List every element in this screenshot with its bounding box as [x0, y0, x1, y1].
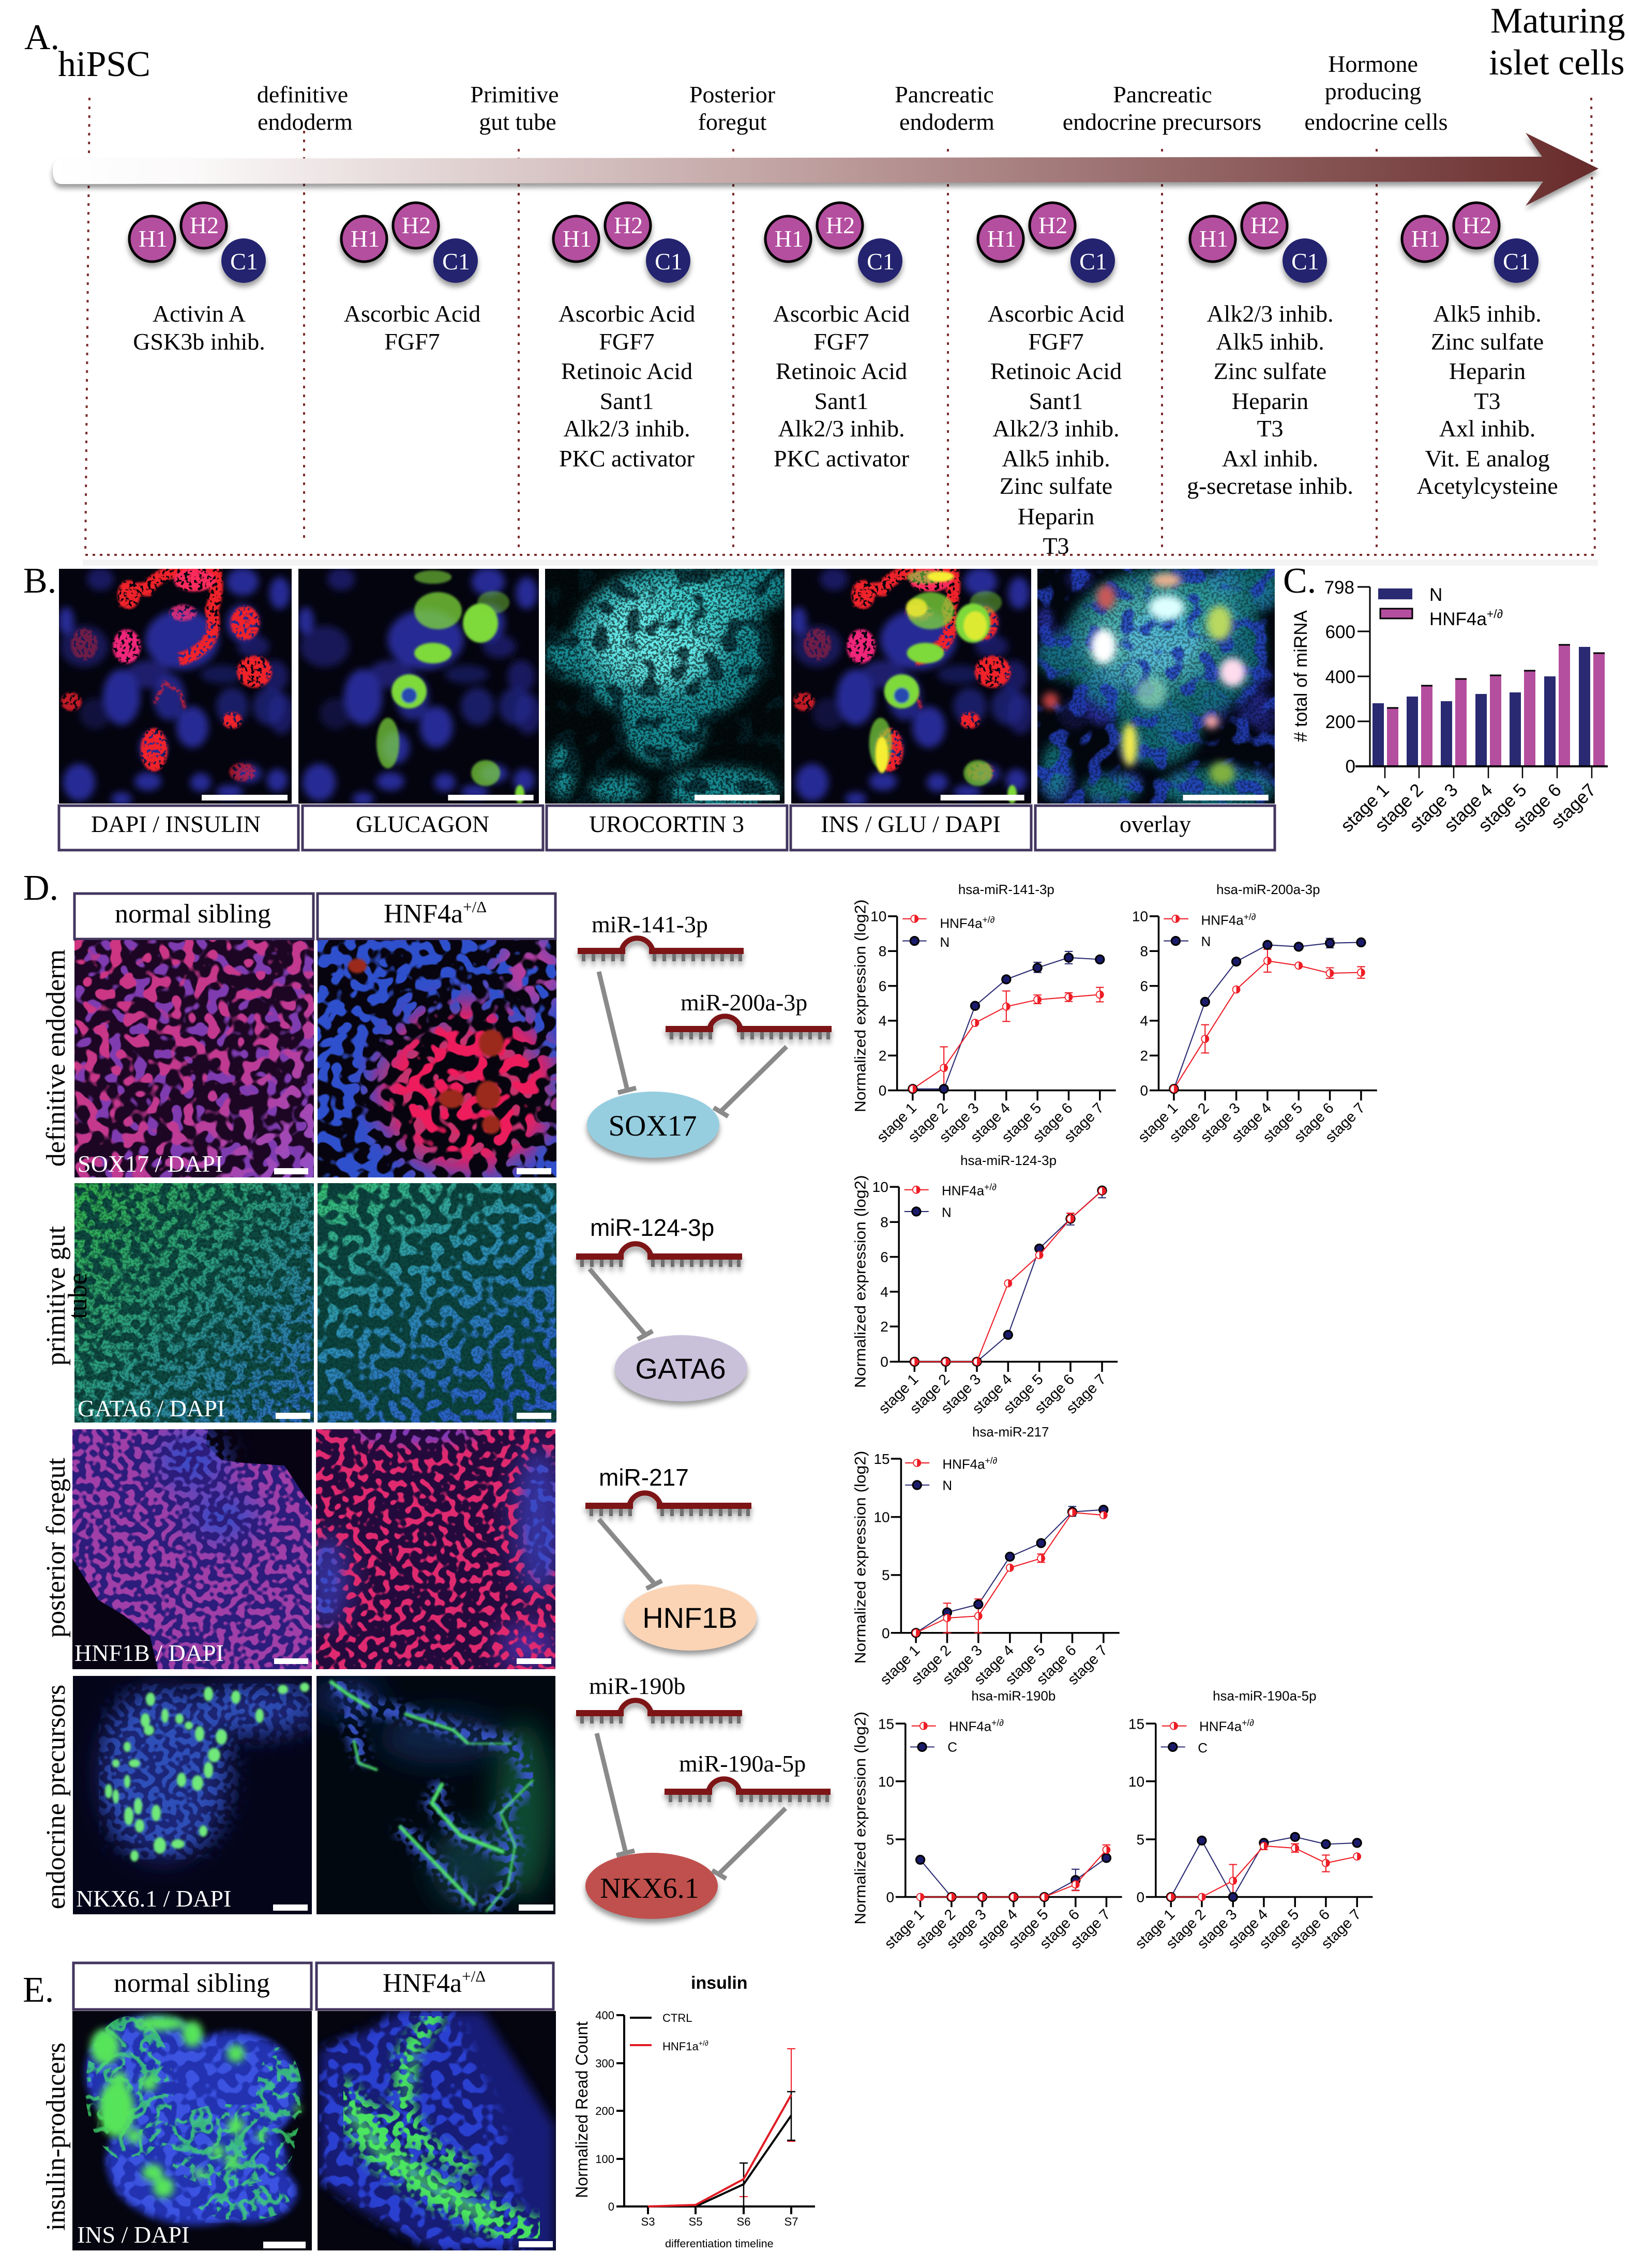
line chart: hsa-miR-190b: stage 2: [913, 1906, 959, 1952]
cell trio icon, stage 1: [129, 203, 266, 283]
line chart: hsa-miR-200a-3p: HNF4a: [1201, 914, 1244, 928]
bar chart: total miRNA per stage: stage 6: [1509, 780, 1565, 836]
line chart: hsa-miR-190b: stage 7: [1067, 1906, 1114, 1952]
line chart: insulin read count: S7: [785, 2215, 798, 2228]
line chart: hsa-miR-190a-5p: stage 7: [1318, 1906, 1364, 1952]
line chart: hsa-miR-200a-3p: stage 1: [1135, 1100, 1181, 1146]
line chart: hsa-miR-141-3p: HNF4a: [940, 916, 983, 931]
line chart: hsa-miR-124-3p: 8: [880, 1214, 888, 1230]
factors: stage 5: Alk5 inhib.: [1002, 445, 1110, 472]
line chart: hsa-miR-217: 15: [873, 1451, 890, 1467]
line chart: hsa-miR-217: hsa-miR-217: [972, 1425, 1049, 1440]
line chart: insulin read count: differentiation timeline: [665, 2237, 774, 2250]
factors: stage 6: Heparin: [1232, 388, 1308, 414]
line chart: hsa-miR-124-3p: 4: [880, 1284, 888, 1300]
line chart: hsa-miR-190b: 5: [886, 1832, 894, 1848]
label texts, panel B: INS / GLU / DAPI: [821, 811, 1001, 837]
line chart: hsa-miR-217: HNF4a: [942, 1457, 985, 1472]
row labels, panel D: definitive endoderm: [41, 949, 71, 1167]
line chart: hsa-miR-200a-3p: 4: [1140, 1013, 1148, 1029]
micrograph: overlay: [1037, 569, 1275, 804]
bar chart: total miRNA per stage: 798: [1324, 578, 1354, 598]
line chart: hsa-miR-124-3p: 6: [880, 1249, 888, 1265]
line chart: insulin read count: insulin: [691, 1973, 748, 1993]
miRNA target diagram: SOX17: miR-141-3p: [592, 911, 708, 938]
micrograph: posterior foregut, HNF4a mutant: [316, 1429, 555, 1669]
line chart: hsa-miR-200a-3p: stage 2: [1166, 1100, 1212, 1146]
factors: stage 6: Alk2/3 inhib.: [1206, 300, 1334, 327]
micrograph: primitive gut tube, normal sibling: [74, 1183, 314, 1423]
line chart: hsa-miR-124-3p: 10: [872, 1179, 888, 1195]
cell trio icon, stage 7: H2: [1462, 212, 1491, 238]
line chart: hsa-miR-200a-3p: 2: [1140, 1048, 1148, 1064]
line chart: hsa-miR-190a-5p: stage 4: [1225, 1906, 1271, 1952]
row labels, panel D: tube: [63, 1273, 93, 1319]
cell trio icon, stage 6: [1190, 203, 1327, 283]
stage headings: foregut: [698, 109, 767, 135]
factors: stage 3: FGF7: [599, 328, 655, 355]
row labels, panel D: [41, 949, 93, 1909]
faint shadow under box: [83, 560, 1598, 566]
line chart: insulin read count: 300: [595, 2057, 614, 2070]
column headers, panel D: HNF4a: [384, 899, 463, 929]
overlay labels on micrographs: SOX17 / DAPI: [78, 1151, 223, 1177]
line chart: hsa-miR-124-3p: stage 1: [876, 1371, 922, 1417]
cell trio icon, stage 3: H1: [563, 225, 592, 252]
line chart: hsa-miR-141-3p: stage 3: [936, 1100, 983, 1146]
line chart: hsa-miR-190b: 15: [878, 1716, 894, 1732]
micrograph: insulin, normal sibling: [72, 2011, 312, 2250]
factors: stage 3: Retinoic Acid: [561, 358, 692, 384]
factors: stage 7: [1416, 300, 1558, 499]
line chart: insulin read count: 400: [595, 2009, 614, 2022]
factors: stage 5: Sant1: [1029, 388, 1083, 414]
label texts, panel B: overlay: [1120, 811, 1191, 837]
line chart: hsa-miR-124-3p: stage 4: [969, 1371, 1015, 1417]
line chart: hsa-miR-190b: +/∂: [991, 1718, 1004, 1728]
factors: stage 4: Alk2/3 inhib.: [778, 415, 905, 442]
label texts, panel B: [91, 811, 1191, 837]
bar chart: total miRNA per stage: stage 3: [1406, 780, 1462, 836]
line chart: hsa-miR-190a-5p: [1128, 1689, 1372, 1952]
line chart: hsa-miR-200a-3p: 0: [1140, 1082, 1148, 1098]
row labels, panel D: posterior foregut: [41, 1457, 71, 1638]
line chart: hsa-miR-141-3p: 2: [879, 1048, 886, 1064]
line chart: hsa-miR-141-3p: 4: [879, 1013, 886, 1029]
cell trio icon, stage 3: C1: [655, 248, 683, 275]
miRNA target diagram: NKX6.1: NKX6.1: [600, 1872, 699, 1904]
line chart: hsa-miR-217: stage 3: [940, 1642, 986, 1688]
stage headings: gut tube: [479, 109, 556, 135]
line chart: hsa-miR-190a-5p: HNF4a: [1199, 1719, 1242, 1734]
factors: stage 3: Sant1: [600, 388, 654, 414]
stage headings: endocrine precursors: [1063, 109, 1261, 135]
overlay labels on micrographs: GATA6 / DAPI: [78, 1395, 225, 1422]
line chart: hsa-miR-141-3p: 10: [870, 909, 886, 925]
line chart: hsa-miR-190b: C: [947, 1740, 957, 1755]
differentiation timeline arrow: [53, 133, 1598, 206]
stage headings: endoderm: [258, 109, 353, 135]
line chart: hsa-miR-190b: stage 4: [975, 1906, 1021, 1952]
factors: stage 6: Alk5 inhib.: [1216, 328, 1324, 355]
line chart: hsa-miR-141-3p: N: [940, 935, 949, 950]
factors: stage 4: Sant1: [814, 388, 868, 414]
line chart: hsa-miR-200a-3p: stage 5: [1260, 1100, 1306, 1146]
micrograph: urocortin 3: [545, 569, 785, 804]
factors: stage 2: Ascorbic Acid: [344, 300, 480, 327]
micrograph: primitive gut tube, HNF4a mutant: [318, 1183, 556, 1423]
bar chart: total miRNA per stage: 600: [1325, 622, 1355, 642]
line chart: hsa-miR-190b: 10: [878, 1774, 894, 1790]
row labels, panel D: primitive gut: [41, 1226, 71, 1366]
micrograph: posterior foregut, normal sibling: [72, 1429, 312, 1669]
line chart: hsa-miR-124-3p: 2: [880, 1319, 888, 1335]
cell trio icon, stage 3: [553, 203, 690, 283]
bar chart: total miRNA per stage: stage 4: [1440, 780, 1497, 836]
line chart: insulin read count: 0: [608, 2200, 614, 2213]
miRNA target diagram: GATA6: miR-124-3p: [590, 1214, 714, 1241]
line chart: hsa-miR-217: stage 7: [1065, 1642, 1111, 1688]
cell trio icon, stage 7: C1: [1503, 248, 1531, 275]
bar chart: total miRNA per stage: 0: [1346, 757, 1355, 777]
micrograph: insulin, HNF4a mutant: [318, 2011, 556, 2250]
line chart: hsa-miR-200a-3p: 10: [1132, 909, 1148, 925]
line chart: hsa-miR-217: Normalized expression (log2): [852, 1451, 869, 1664]
cell trio icon, stage 4: C1: [867, 248, 895, 275]
line chart: hsa-miR-141-3p: stage 7: [1061, 1100, 1107, 1146]
column headers, panel E: [73, 1963, 553, 2009]
cell trio icon, stage 2: C1: [442, 248, 470, 275]
line chart: hsa-miR-217: 10: [873, 1509, 890, 1525]
line chart: hsa-miR-190a-5p: hsa-miR-190a-5p: [1213, 1689, 1317, 1704]
stage headings: producing: [1325, 78, 1421, 104]
line chart: hsa-miR-217: [852, 1425, 1120, 1688]
factors: stage 1: GSK3b inhib.: [133, 328, 265, 355]
line chart: hsa-miR-200a-3p: 8: [1140, 943, 1148, 959]
bar chart: total miRNA per stage: HNF4a: [1429, 609, 1487, 629]
line charts, lower block: [852, 1425, 1372, 1952]
bar chart: total miRNA per stage: N: [1429, 585, 1442, 605]
line chart: hsa-miR-124-3p: hsa-miR-124-3p: [960, 1154, 1057, 1168]
miRNA target diagram: NKX6.1: miR-190b: [589, 1673, 686, 1699]
miRNA target diagram: NKX6.1: miR-190a-5p: [679, 1750, 806, 1777]
cell trio icon, stage 5: C1: [1079, 248, 1107, 275]
factors: stage 3: [559, 300, 695, 472]
factors: stage 4: Retinoic Acid: [776, 358, 907, 384]
line charts, top block: [852, 883, 1377, 1417]
line chart: insulin read count: 100: [595, 2153, 614, 2166]
stage headings: definitive: [257, 81, 348, 108]
label texts, panel B: DAPI / INSULIN: [91, 811, 261, 837]
factors: stage 1: Activin A: [153, 300, 246, 327]
line chart: hsa-miR-190b: Normalized expression (log2): [852, 1712, 869, 1925]
column headers, panel D: normal sibling: [115, 899, 271, 929]
factors: stage 6: T3: [1257, 415, 1284, 442]
line chart: hsa-miR-217: +/∂: [985, 1455, 998, 1465]
cell trio icon, stage 5: H1: [987, 225, 1016, 252]
miRNA target diagram: GATA6: [576, 1214, 747, 1401]
end cell type: maturing islet cells: [1489, 1, 1625, 83]
line chart: hsa-miR-190a-5p: 5: [1137, 1832, 1144, 1848]
line chart: hsa-miR-217: 5: [882, 1567, 890, 1583]
factors: stage 5: [988, 300, 1124, 559]
line chart: hsa-miR-190a-5p: 10: [1128, 1774, 1144, 1790]
column headers, panel E: normal sibling: [114, 1969, 270, 1998]
overlay label INS / DAPI: INS / DAPI: [77, 2221, 189, 2248]
line chart: hsa-miR-200a-3p: stage 6: [1291, 1100, 1337, 1146]
line chart: hsa-miR-217: stage 2: [908, 1642, 955, 1688]
line chart: hsa-miR-141-3p: 8: [879, 943, 886, 959]
factors: stage 5: Heparin: [1018, 503, 1094, 530]
factors: stage 5: T3: [1043, 533, 1069, 559]
stage headings: Hormone: [1328, 51, 1418, 77]
overlay labels on micrographs: HNF1B / DAPI: [74, 1640, 224, 1666]
factors: stage 5: Alk2/3 inhib.: [992, 415, 1120, 442]
line chart: hsa-miR-200a-3p: hsa-miR-200a-3p: [1216, 883, 1320, 897]
factors: stage 6: Axl inhib.: [1222, 445, 1318, 472]
cell trio icon, stage 5: H2: [1038, 212, 1067, 238]
line chart: hsa-miR-141-3p: stage 6: [1030, 1100, 1076, 1146]
label boxes, panel B: [59, 806, 1275, 850]
line chart: hsa-miR-200a-3p: [1132, 883, 1377, 1146]
line chart: hsa-miR-141-3p: stage 2: [905, 1100, 951, 1146]
line chart: hsa-miR-190a-5p: stage 6: [1287, 1906, 1333, 1952]
line chart: hsa-miR-190a-5p: 0: [1137, 1889, 1144, 1906]
line chart: hsa-miR-124-3p: 0: [880, 1354, 888, 1370]
bar chart: total miRNA per stage: 400: [1325, 667, 1355, 687]
line chart: hsa-miR-124-3p: stage 7: [1063, 1371, 1109, 1417]
micrograph: endocrine precursors, normal sibling: [73, 1676, 312, 1914]
column headers, panel D: +/Δ: [463, 898, 487, 916]
line chart: hsa-miR-190a-5p: C: [1198, 1741, 1208, 1756]
miRNA target diagram: SOX17: miR-200a-3p: [681, 989, 807, 1016]
line chart: hsa-miR-190b: hsa-miR-190b: [971, 1689, 1055, 1704]
line chart: hsa-miR-124-3p: +/∂: [984, 1182, 997, 1192]
factors: stage 7: T3: [1474, 388, 1501, 414]
line chart: hsa-miR-190a-5p: 15: [1128, 1716, 1144, 1732]
line chart: insulin read count: S5: [689, 2215, 702, 2228]
stage boundaries: dotted lines and box: [85, 98, 1595, 555]
line chart: insulin read count: [572, 1973, 815, 2250]
line chart: hsa-miR-190b: stage 5: [1005, 1906, 1052, 1952]
factors: stage 7: Alk5 inhib.: [1433, 300, 1542, 327]
factors: stage 7: Axl inhib.: [1439, 415, 1535, 442]
factors: stage 5: Ascorbic Acid: [988, 300, 1124, 327]
line chart: hsa-miR-200a-3p: N: [1201, 934, 1211, 949]
line chart: hsa-miR-124-3p: HNF4a: [942, 1184, 984, 1198]
line chart: hsa-miR-141-3p: stage 4: [968, 1100, 1014, 1146]
line chart: hsa-miR-190b: stage 1: [881, 1906, 928, 1952]
bar chart: total miRNA per stage: stage 1: [1337, 780, 1393, 836]
line chart: hsa-miR-200a-3p: +/∂: [1244, 912, 1256, 922]
factors: stage 6: Zinc sulfate: [1214, 358, 1326, 384]
factors: stage 4: Ascorbic Acid: [773, 300, 910, 327]
line chart: insulin read count: S3: [641, 2215, 655, 2228]
panel label C: C.: [1283, 561, 1316, 601]
end cell type: maturing islet cells: Maturing: [1490, 1, 1625, 41]
stage headings: endoderm: [899, 109, 994, 135]
cell trio icon, stage 6: H2: [1250, 212, 1279, 238]
label texts, panel B: GLUCAGON: [356, 811, 489, 837]
factors: stage 5: FGF7: [1028, 328, 1084, 355]
line chart: insulin read count: Normalized Read Count: [572, 2021, 591, 2198]
line chart: hsa-miR-141-3p: stage 5: [999, 1100, 1045, 1146]
line chart: hsa-miR-141-3p: 6: [879, 978, 886, 994]
factors: stage 1: [133, 300, 265, 355]
factors: stage 3: Alk2/3 inhib.: [563, 415, 690, 442]
cell trio icon, stage 7: H1: [1411, 225, 1440, 252]
line chart: insulin read count: S6: [737, 2215, 750, 2228]
line chart: hsa-miR-217: stage 5: [1002, 1642, 1048, 1688]
miRNA target diagram: SOX17: SOX17: [608, 1110, 697, 1142]
line chart: hsa-miR-190a-5p: stage 1: [1132, 1906, 1178, 1952]
stage headings: Pancreatic: [1113, 81, 1212, 108]
line chart: hsa-miR-141-3p: stage 1: [874, 1100, 920, 1146]
line chart: hsa-miR-141-3p: [852, 883, 1116, 1146]
miRNA target diagram: SOX17: [578, 911, 832, 1158]
cell trio icon, stage 4: [765, 203, 902, 283]
factors: stage 4: FGF7: [813, 328, 869, 355]
line chart: hsa-miR-141-3p: 0: [879, 1082, 886, 1098]
factors: stage 2: FGF7: [384, 328, 440, 355]
factors: stage 7: Acetylcysteine: [1416, 473, 1558, 499]
cell trio icon, stage 4: H1: [775, 225, 804, 252]
cell trio icon, stage 1: H1: [139, 225, 168, 252]
line chart: hsa-miR-217: N: [942, 1479, 952, 1493]
factors: stage 6: g-secretase inhib.: [1187, 473, 1353, 499]
miRNA target diagram: HNF1B: HNF1B: [642, 1601, 737, 1634]
line chart: hsa-miR-190b: 0: [886, 1889, 894, 1906]
line chart: insulin read count: CTRL: [662, 2012, 692, 2024]
micrograph: endocrine precursors, HNF4a mutant: [311, 1676, 555, 1914]
cell trio icon, stage 5: [978, 203, 1115, 283]
micrograph: definitive endoderm, HNF4a mutant: [318, 940, 556, 1177]
line chart: hsa-miR-217: stage 6: [1033, 1642, 1080, 1688]
line chart: insulin read count: +/∂: [699, 2039, 708, 2047]
factors: stage 7: Vit. E analog: [1425, 445, 1550, 472]
micrograph: definitive endoderm, normal sibling: [74, 940, 314, 1177]
column headers, panel E: HNF4a: [383, 1969, 462, 1998]
factors: stage 3: PKC activator: [559, 445, 695, 472]
column headers, panel D: [74, 894, 555, 939]
panel label D: D.: [23, 868, 58, 908]
factors: stage 7: Zinc sulfate: [1431, 328, 1544, 355]
line chart: hsa-miR-217: stage 4: [971, 1642, 1017, 1688]
line chart: hsa-miR-124-3p: [852, 1154, 1118, 1417]
line chart: hsa-miR-190a-5p: stage 3: [1194, 1906, 1240, 1952]
row labels, panel D: endocrine precursors: [41, 1685, 71, 1909]
line chart: hsa-miR-141-3p: Normalized expression (log2): [852, 899, 869, 1112]
cell trio icon, stage 7: [1402, 203, 1538, 283]
line chart: hsa-miR-124-3p: stage 3: [938, 1371, 984, 1417]
bar chart: total miRNA per stage: [1291, 578, 1608, 836]
stage headings: [257, 51, 1448, 135]
end cell type: maturing islet cells: islet cells: [1489, 43, 1624, 83]
factors: stage 4: PKC activator: [774, 445, 909, 472]
cell trio icon, stage 1: C1: [230, 248, 258, 275]
line chart: hsa-miR-190a-5p: stage 5: [1256, 1906, 1302, 1952]
cell trio icon, stage 6: H1: [1199, 225, 1228, 252]
stage headings: Pancreatic: [895, 81, 994, 108]
factors: stage 6: [1187, 300, 1353, 499]
stage headings: Posterior: [689, 81, 775, 108]
overlay labels on micrographs: [74, 1151, 231, 1912]
line chart: hsa-miR-200a-3p: 6: [1140, 978, 1148, 994]
cell trio icon, stage 2: [341, 203, 478, 283]
factors: stage 5: Retinoic Acid: [990, 358, 1122, 384]
bar chart: total miRNA per stage: stage 2: [1371, 780, 1427, 836]
line chart: hsa-miR-190a-5p: +/∂: [1242, 1718, 1254, 1728]
cell trio icon, stage 6: C1: [1291, 248, 1319, 275]
column headers, panel E: +/Δ: [462, 1967, 486, 1985]
starting cell type: hiPSC: hiPSC: [58, 44, 150, 84]
line chart: hsa-miR-124-3p: stage 6: [1032, 1371, 1078, 1417]
line chart: hsa-miR-190b: stage 6: [1037, 1906, 1083, 1952]
row label, panel E: insulin-producers: [41, 2043, 71, 2231]
stage headings: Primitive: [470, 81, 559, 108]
factors: stage 2: [344, 300, 480, 355]
line chart: hsa-miR-200a-3p: stage 7: [1322, 1100, 1368, 1146]
panel label E: E.: [23, 1970, 54, 2010]
line chart: hsa-miR-200a-3p: stage 3: [1197, 1100, 1244, 1146]
factors: stage 7: Heparin: [1449, 358, 1526, 384]
line chart: hsa-miR-141-3p: hsa-miR-141-3p: [958, 883, 1054, 897]
bar chart: total miRNA per stage: # total of miRNA: [1291, 610, 1311, 742]
cell trio icon, stage 2: H1: [351, 225, 380, 252]
cell trio icon, stage 4: H2: [826, 212, 855, 238]
cell trio icon, stage 3: H2: [614, 212, 643, 238]
label texts, panel B: UROCORTIN 3: [589, 811, 744, 837]
line chart: hsa-miR-141-3p: +/∂: [983, 915, 995, 925]
bar chart: total miRNA per stage: stage7: [1547, 780, 1600, 833]
cell trio icon, stage 1: H2: [190, 212, 219, 238]
line chart: insulin read count: 200: [595, 2105, 614, 2118]
bar chart: total miRNA per stage: stage 5: [1474, 780, 1531, 836]
micrograph: INS / GLU / DAPI: [791, 569, 1031, 804]
line chart: hsa-miR-190b: stage 3: [943, 1906, 990, 1952]
miRNA target diagram: NKX6.1: [576, 1673, 831, 1919]
cell trio icon, stage 2: H2: [402, 212, 431, 238]
line chart: hsa-miR-190a-5p: stage 2: [1163, 1906, 1209, 1952]
line chart: hsa-miR-190b: [852, 1689, 1122, 1952]
line chart: hsa-miR-217: 0: [882, 1625, 890, 1641]
line chart: hsa-miR-124-3p: Normalized expression (log2): [852, 1175, 869, 1388]
micrograph: DAPI / insulin: [59, 569, 292, 804]
line chart: hsa-miR-124-3p: N: [942, 1205, 952, 1220]
factors: stage 3: Ascorbic Acid: [559, 300, 695, 327]
line chart: insulin read count: HNF1a: [662, 2040, 699, 2053]
line chart: hsa-miR-190b: HNF4a: [949, 1719, 991, 1734]
miRNA target diagram: HNF1B: [585, 1464, 757, 1651]
bar chart: total miRNA per stage: +/∂: [1487, 607, 1503, 621]
miRNA target diagram: HNF1B: miR-217: [599, 1464, 689, 1491]
factors: stage 4: [773, 300, 910, 472]
panel label B: B.: [23, 561, 56, 601]
line chart: hsa-miR-200a-3p: stage 4: [1229, 1100, 1275, 1146]
micrograph: glucagon: [298, 569, 539, 804]
stage headings: endocrine cells: [1304, 109, 1448, 135]
line chart: hsa-miR-217: stage 1: [877, 1642, 923, 1688]
factors: stage 5: Zinc sulfate: [1000, 473, 1112, 499]
miRNA target diagram: GATA6: GATA6: [635, 1352, 726, 1385]
bar chart: total miRNA per stage: 200: [1325, 712, 1355, 732]
overlay labels on micrographs: NKX6.1 / DAPI: [76, 1885, 231, 1912]
line chart: hsa-miR-124-3p: stage 5: [1000, 1371, 1047, 1417]
line chart: hsa-miR-124-3p: stage 2: [907, 1371, 953, 1417]
panel label A: A.: [24, 18, 59, 57]
